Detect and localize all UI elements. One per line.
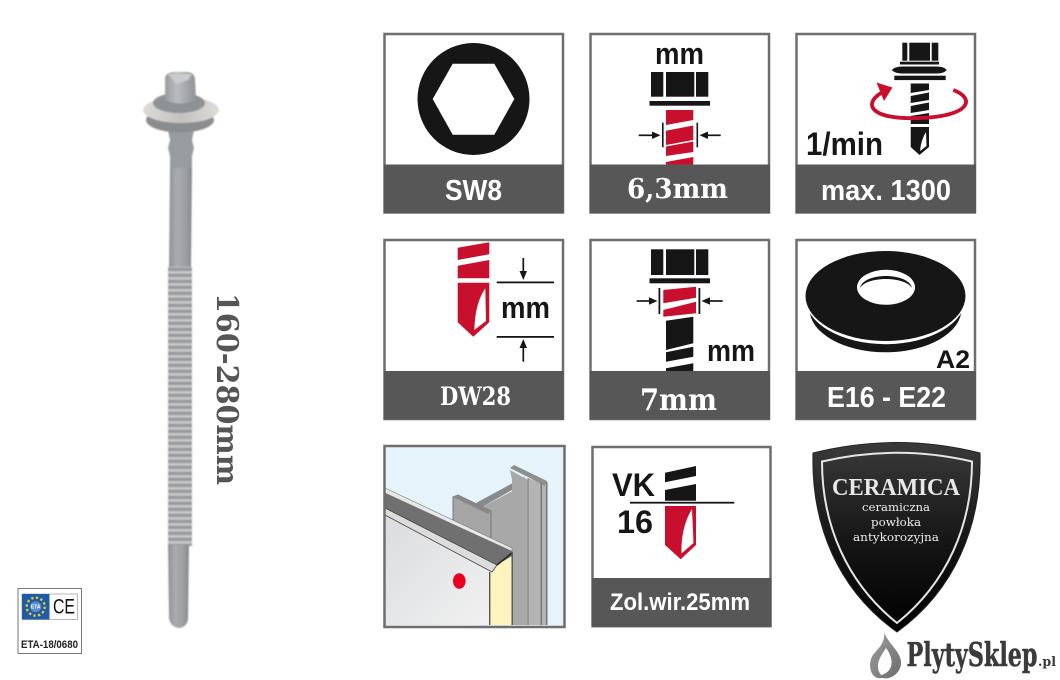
logo: PlytySklep.pl: .pl [1038, 655, 1056, 670]
panel: max. 1300 [796, 34, 976, 213]
panel: DW28: DW28 [440, 382, 511, 411]
certificate badge: ETA CE: ETA-18/0680 [21, 639, 78, 651]
icon: drilling capacity [630, 466, 734, 559]
sandwich panel [385, 488, 513, 625]
panel: SW8 [384, 34, 564, 213]
panel: SW8: SW8 [445, 175, 502, 207]
icon: washer [805, 250, 966, 352]
steel column [453, 465, 548, 625]
panel: Zol.wir.25mm: 16 [617, 504, 653, 540]
icon: rotating screw [872, 43, 966, 155]
panel: Zol.wir.25mm: VK [612, 467, 655, 503]
panel: 6,3mm: mm [655, 36, 704, 71]
panel: 7mm: mm [707, 333, 755, 368]
icon: EU flag: ETA [31, 604, 41, 610]
icon: flame [870, 632, 901, 678]
panel: application illustration [384, 446, 564, 627]
badge: CERAMICA shield [813, 442, 980, 632]
panel: DW28 [384, 240, 564, 420]
icon: thread length [637, 249, 723, 372]
panel: 7mm [590, 240, 770, 420]
badge: CERAMICA shield: ceramiczna [862, 501, 930, 514]
icon: drill tip length [458, 242, 554, 362]
panel: E16 - E22 [796, 240, 976, 420]
badge: CERAMICA shield: antykorozyjna [853, 531, 939, 544]
screw photo [143, 72, 219, 628]
icon: hex socket [418, 43, 530, 155]
certificate badge: ETA CE: CE [53, 596, 75, 618]
panel: Zol.wir.25mm: Zol.wir.25mm [610, 589, 750, 616]
length label: 160-280mm [209, 293, 244, 485]
panel: max. 1300: max. 1300 [821, 175, 951, 207]
panel: E16 - E22: E16 - E22 [827, 382, 946, 414]
panel: 6,3mm [590, 34, 770, 213]
panel: E16 - E22: A2 [936, 346, 970, 374]
panel: Zol.wir.25mm [592, 447, 772, 627]
certificate badge: ETA CE [18, 588, 82, 654]
badge: CERAMICA shield: powłoka [871, 516, 921, 529]
logo: PlytySklep.pl [870, 632, 1056, 678]
panel: max. 1300: 1/min [806, 126, 883, 162]
panel: 7mm: 7mm [640, 383, 717, 418]
icon: thread diameter [639, 72, 721, 165]
fastener mark [453, 573, 466, 589]
badge: CERAMICA shield: CERAMICA [832, 475, 961, 501]
panel: 6,3mm: 6,3mm [627, 174, 728, 205]
panel: DW28: mm [501, 290, 550, 325]
